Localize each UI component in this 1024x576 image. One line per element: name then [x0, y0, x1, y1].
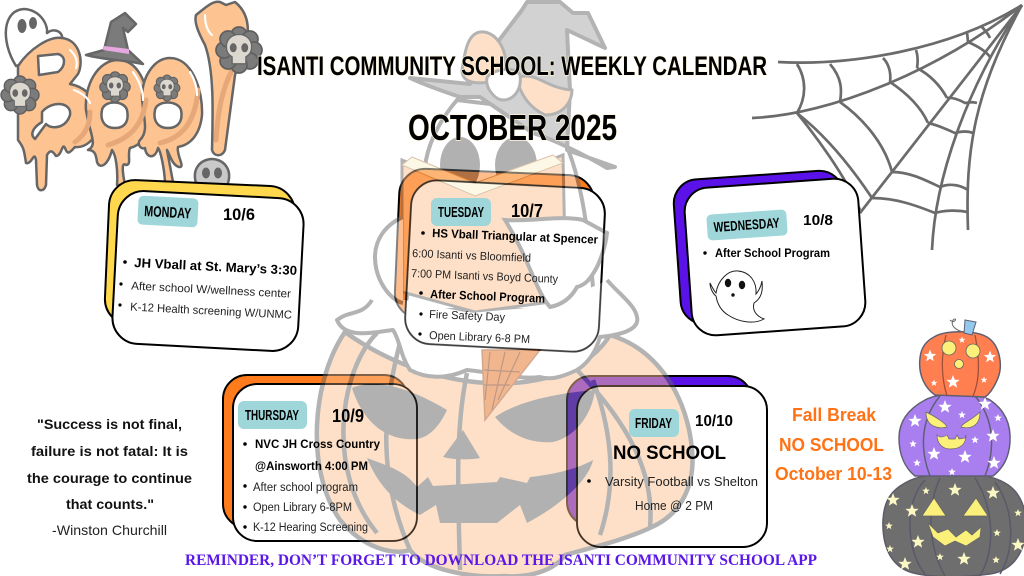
text: Tuesday: 10/7 — [511, 201, 543, 221]
text: Monday: JH Vball at St. Mary’s 3:30 — [134, 255, 297, 278]
text: Thursday: Open Library 6-8PM — [253, 502, 352, 514]
text: Thursday: NVC JH Cross Country — [255, 437, 380, 451]
text: Friday: FRIDAY — [635, 415, 672, 432]
text: Monday: MONDAY — [144, 203, 192, 222]
text: Thursday: 10/9 — [332, 406, 364, 426]
icon: ghost — [710, 271, 764, 322]
panel: Wednesday — [672, 169, 867, 337]
text: Wednesday — [703, 209, 833, 260]
book pages — [402, 155, 563, 196]
text: Monday — [118, 195, 297, 322]
callout: fall break — [775, 405, 892, 484]
book — [402, 155, 566, 312]
quote: the courage to continue — [27, 470, 192, 486]
quote: -Winston Churchill — [52, 522, 167, 538]
panel: Thursday — [223, 375, 417, 541]
text: Thursday: K-12 Hearing Screening — [253, 522, 368, 534]
reminder banner: REMINDER, DON’T FORGET TO DOWNLOAD THE ISANTI COMMUNITY SCHOOL APP — [185, 552, 818, 569]
text: Tuesday: Open Library 6-8 PM — [429, 330, 530, 346]
ice cream cone — [482, 350, 540, 420]
callout: fall break: Fall Break — [792, 405, 877, 425]
quote: that counts." — [66, 496, 154, 512]
quote: failure is not fatal: It is — [31, 443, 188, 459]
text: Wednesday: WEDNESDAY — [713, 214, 781, 235]
icon: black pumpkin — [883, 473, 1024, 576]
witch bow and skull — [462, 32, 572, 115]
witch eyes — [440, 137, 537, 193]
text: Tuesday: HS Vball Triangular at Spencer — [432, 226, 599, 247]
icon: skull flower on second O — [154, 75, 180, 101]
exclamation mark — [195, 2, 248, 155]
callout: fall break: October 10-13 — [775, 464, 892, 484]
text: Friday: NO SCHOOL — [613, 443, 726, 464]
panel: Monday — [104, 179, 305, 352]
icon: purple pumpkin — [899, 394, 1010, 476]
text: Friday — [587, 409, 758, 513]
title: ISANTI COMMUNITY SCHOOL: WEEKLY CALENDAR — [257, 51, 767, 81]
icon: skull flower on exclamation — [216, 27, 262, 73]
month heading: OCTOBER 2025 — [408, 107, 617, 148]
icon: witch hat on O — [86, 13, 143, 64]
text: Thursday: THURSDAY — [245, 407, 299, 424]
pumpkin body — [317, 332, 693, 576]
highlights on letters — [70, 15, 212, 103]
illustration: translucent witch ice cream pumpkin — [317, 2, 693, 576]
letter O second — [139, 58, 202, 182]
witch body — [405, 100, 595, 310]
letter O — [86, 60, 149, 185]
witch hands — [375, 217, 607, 307]
shading on letters — [75, 70, 232, 145]
text: Tuesday: Fire Safety Day — [429, 309, 506, 324]
icon: ghost on letter B — [6, 9, 62, 66]
text: Monday: After school W/wellness center — [131, 281, 291, 301]
ice cream outline — [337, 280, 637, 378]
holes in letters — [32, 54, 181, 139]
illustration: Boo lettering — [6, 2, 248, 190]
text: Monday: K-12 Health screening W/UNMC — [130, 302, 292, 322]
text: Thursday: @Ainsworth 4:00 PM — [255, 459, 368, 473]
text: Tuesday — [411, 198, 599, 346]
illustration: spider web — [752, 5, 1022, 250]
text: Monday: 10/6 — [223, 205, 255, 224]
text: Tuesday: 6:00 Isanti vs Bloomfield — [412, 248, 531, 265]
text: Tuesday: After School Program — [430, 287, 545, 306]
illustration: stacked pumpkins — [883, 319, 1024, 576]
pumpkin face — [352, 384, 595, 523]
icon: skull dot — [195, 159, 229, 186]
text: Tuesday: 7:00 PM Isanti vs Boyd County — [411, 268, 558, 286]
text: Thursday — [238, 401, 380, 534]
quote: "Success is not final, — [37, 416, 182, 432]
text: Thursday: After school program — [253, 482, 358, 494]
text: Friday: Varsity Football vs Shelton — [605, 475, 758, 489]
quote — [27, 416, 192, 538]
text: Friday: 10/10 — [695, 413, 733, 430]
pumpkin lobes — [343, 333, 651, 570]
ice cream scoop — [337, 280, 637, 378]
text: Wednesday: After School Program — [715, 246, 830, 260]
witch hat — [410, 2, 615, 168]
letter B — [18, 38, 99, 190]
icon: orange pumpkin — [920, 319, 1000, 397]
callout: fall break: NO SCHOOL — [779, 435, 884, 455]
card outlines re-inked — [233, 179, 767, 547]
text: Friday: Home @ 2 PM — [635, 499, 713, 513]
panel: Tuesday — [394, 168, 606, 353]
panel: Friday — [567, 376, 767, 547]
text: Tuesday: TUESDAY — [438, 204, 484, 221]
icon: skull flower left — [1, 76, 39, 114]
text: Wednesday: 10/8 — [803, 212, 833, 229]
icon: skull flower on O — [100, 72, 130, 102]
